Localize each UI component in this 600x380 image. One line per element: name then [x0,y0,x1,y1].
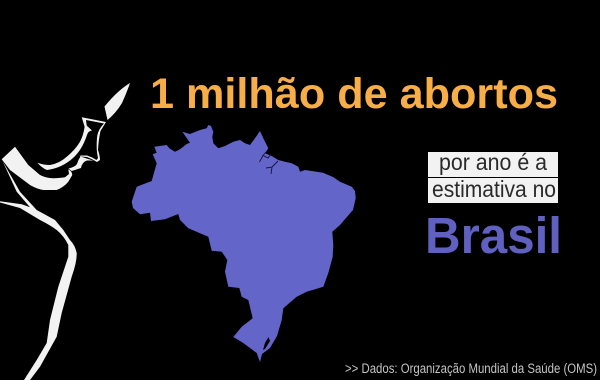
text line: estimativa no: estimativa no [432,176,556,202]
illustration: woman's face in profile [0,83,130,380]
forehead spike [104,83,130,120]
Lagoa dos Patos [263,337,270,350]
lips and nostril [68,156,94,171]
neck and shoulder line [0,161,77,380]
title: 1 milhão de abortos [150,70,558,118]
brow and nose outline [80,117,106,162]
Amazon river mouth [260,152,278,174]
text line: por ano é a: por ano é a [439,149,547,175]
map of Brazil [132,125,356,362]
heading: Brasil: Brasil [425,207,562,264]
chin and jaw sweep [2,147,72,190]
eyelid crescent [37,124,92,170]
